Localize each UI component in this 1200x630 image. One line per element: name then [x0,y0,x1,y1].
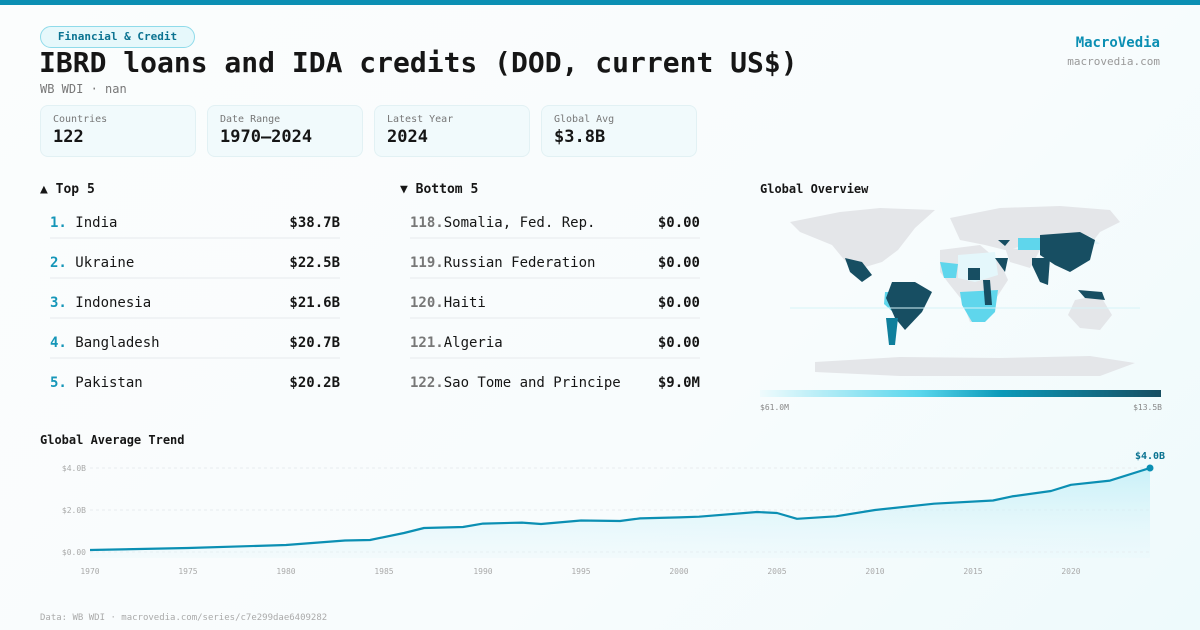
panel: top 5: $20.7B [289,335,340,351]
subtitle: WB WDI · nan [40,82,127,96]
panel: top 5: $22.5B [289,255,340,271]
card: global avg: Global Avg [554,114,614,125]
line chart: global average trend: 2000 [669,567,689,576]
heading: global average trend: Global Average Trend [40,433,184,447]
line chart: global average trend: 1980 [276,567,296,576]
panel: top 5: $38.7B [289,215,340,231]
card: latest year: Latest Year [387,114,453,125]
panel: top 5: 2. Ukraine [50,255,134,271]
stat cards [40,105,697,157]
colour scale legend [760,390,1161,397]
panel: global overview map: $61.0M [760,403,789,412]
brand: MacroVedia [1076,35,1160,51]
panel: top 5: 1. India [50,215,117,231]
card: date range [207,105,363,157]
panel: top 5: $21.6B [289,295,340,311]
line chart: global average trend: 1970 [80,567,100,576]
card: countries: 122 [53,127,84,147]
card: latest year: 2024 [387,127,428,147]
line chart: global average trend [62,451,1165,576]
panel: global overview map: $13.5B [1133,403,1162,412]
panel: bottom 5: $9.0M [658,375,700,391]
panel: bottom 5: $0.00 [658,335,700,351]
panel: top 5: $20.2B [289,375,340,391]
panel: top 5 [40,182,340,391]
category badge: Financial & Credit [58,30,177,43]
line chart: global average trend: 2015 [963,567,983,576]
card: countries [40,105,196,157]
choropleth map [790,206,1140,376]
line chart: global average trend: 1975 [178,567,198,576]
footer source: Data: WB WDI · macrovedia.com/series/c7e299dae6409282 [40,613,327,623]
category badge [40,26,195,48]
panel: bottom 5: $0.00 [658,255,700,271]
card: latest year [374,105,530,157]
panel: bottom 5: 118.Somalia, Fed. Rep. [410,215,595,231]
card: global avg: $3.8B [554,127,605,147]
line chart: global average trend: 2010 [865,567,885,576]
line chart: global average trend: 1990 [473,567,493,576]
line chart: global average trend: $4.0B [1135,451,1165,462]
panel: global overview map [760,182,1162,412]
panel: bottom 5 [400,182,700,391]
heading: bottom 5: ▼ Bottom 5 [400,182,478,197]
heading: top 5: ▲ Top 5 [40,182,95,197]
line chart: global average trend: 1995 [571,567,591,576]
line chart: global average trend: 2020 [1061,567,1081,576]
panel: bottom 5: $0.00 [658,295,700,311]
panel: bottom 5: $0.00 [658,215,700,231]
panel: top 5: 3. Indonesia [50,295,151,311]
line chart: global average trend: 2005 [767,567,787,576]
heading: global overview: Global Overview [760,182,868,196]
brand: macrovedia.com [1067,55,1160,68]
line chart: global average trend: $0.00 [62,548,86,557]
panel: top 5: 4. Bangladesh [50,335,160,351]
panel: bottom 5: 122.Sao Tome and Principe [410,375,621,391]
title: IBRD loans and IDA credits (DOD, current US$) [39,46,798,79]
line chart: global average trend: $2.0B [62,506,86,515]
panel: bottom 5: 120.Haiti [410,295,486,311]
line chart: global average trend: 1985 [374,567,394,576]
brand [1067,35,1160,68]
card: date range: 1970–2024 [220,127,312,147]
panel: bottom 5: 119.Russian Federation [410,255,595,271]
card: global avg [541,105,697,157]
top bar [0,0,1200,5]
card: countries: Countries [53,114,107,125]
card: date range: Date Range [220,114,280,125]
line chart: global average trend: $4.0B [62,464,86,473]
panel: bottom 5: 121.Algeria [410,335,503,351]
panel: top 5: 5. Pakistan [50,375,143,391]
